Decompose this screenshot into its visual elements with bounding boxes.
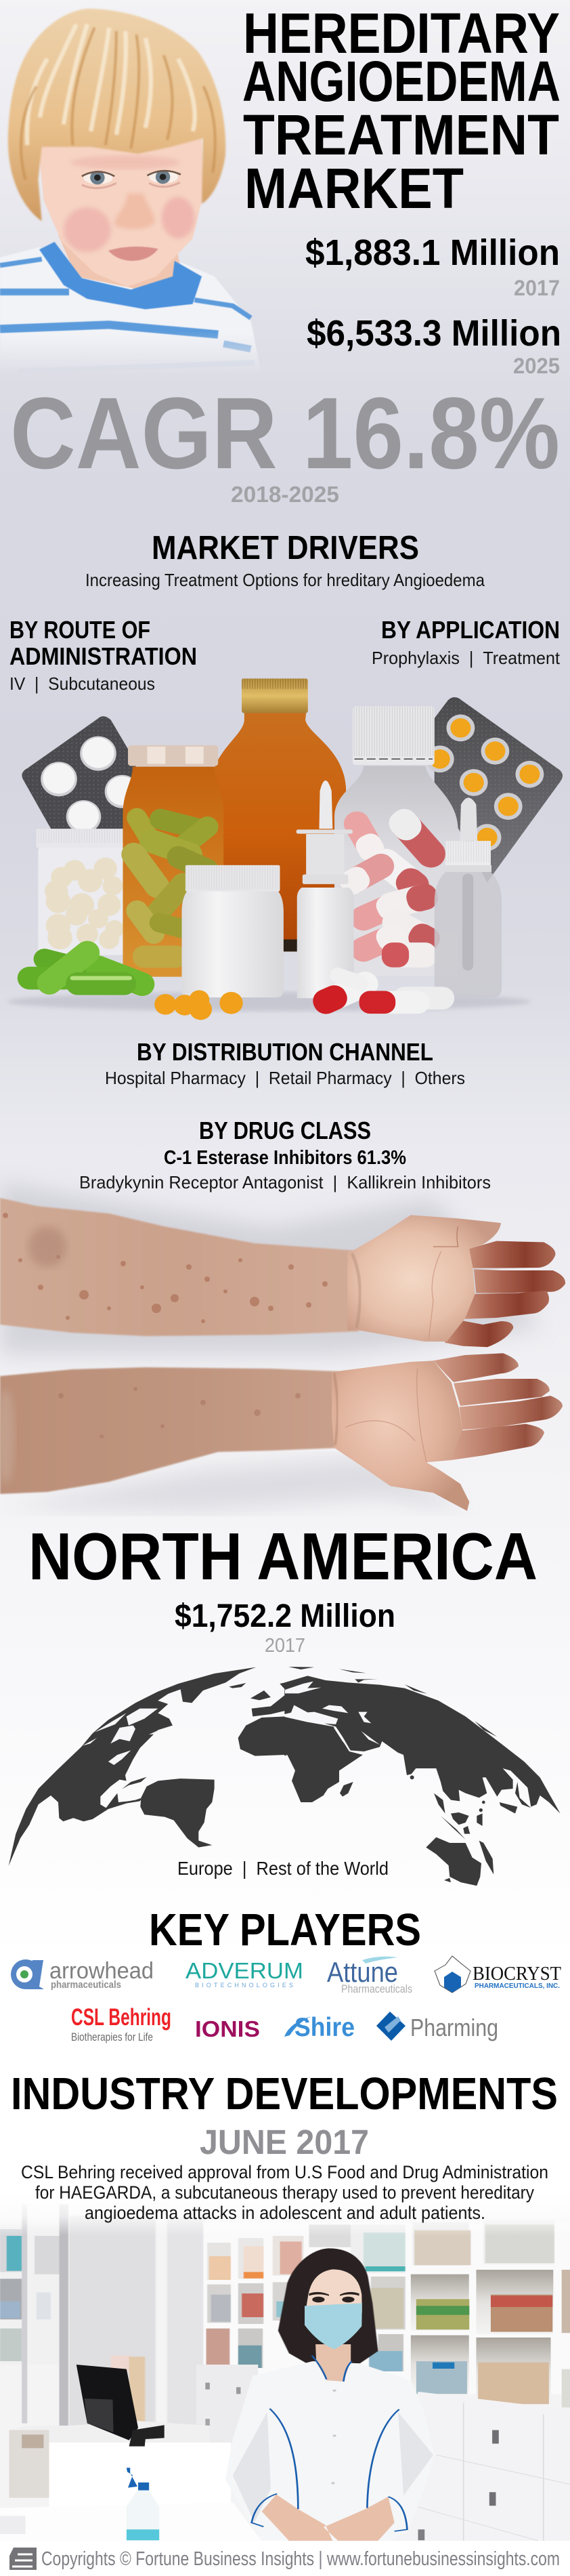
mouth (108, 247, 158, 261)
logo: Pharming (376, 2012, 498, 2041)
caribbean islands (122, 1777, 147, 1789)
north america heading (28, 1519, 538, 1657)
by route of administration: ADMINISTRATION (9, 642, 197, 670)
northwest africa (238, 1716, 285, 1756)
left shelves (0, 2204, 68, 2441)
western europe (252, 1695, 285, 1716)
upper forearm rash spots (3, 1213, 328, 1323)
shelves: right niches (411, 2270, 570, 2407)
by distribution channel: BY DISTRIBUTION CHANNEL (137, 1038, 433, 1066)
world map (9, 1667, 561, 1886)
lower fingers (433, 1353, 563, 1460)
lower palm and thumb (332, 1360, 469, 1511)
by drug class: BY DRUG CLASS (199, 1117, 371, 1144)
logo: Shire: Shire (294, 2013, 355, 2042)
logo: Attune: Attune (327, 1956, 398, 1988)
stat: 2017 market value: 2017 (514, 276, 560, 300)
red and white capsules (309, 965, 454, 1018)
large amber bottle (210, 678, 347, 951)
map west half (9, 1667, 285, 1866)
africa east (284, 1716, 363, 1802)
by drug class (79, 1117, 491, 1192)
key players heading: KEY PLAYERS (149, 1905, 421, 1955)
shelves: left column products (204, 2220, 570, 2394)
north america (9, 1667, 256, 1866)
shirt stripes (0, 259, 255, 371)
south america (140, 1779, 215, 1848)
left blister pack (22, 716, 139, 833)
orange softgels (154, 990, 243, 1020)
upper forearm (0, 1198, 359, 1336)
north america heading: 2017 (265, 1635, 305, 1657)
australia (426, 1837, 481, 1886)
by distribution channel (105, 1038, 465, 1088)
nasal spray bottle (297, 781, 354, 998)
by distribution channel: Hospital Pharmacy | Retail Pharmacy | Others (105, 1068, 465, 1088)
shirt (0, 247, 257, 360)
north america heading: $1,752.2 Million (175, 1598, 395, 1634)
logo: Pharming: Pharming (410, 2014, 498, 2041)
pharmacist coat (225, 2361, 435, 2541)
development description: angioedema attacks in adolescent and adult patients. (85, 2203, 485, 2223)
lower forearm marks (58, 1387, 301, 1438)
stat: 2017 market value (305, 232, 560, 300)
inland seas (284, 1682, 380, 1749)
forearms and hands (262, 2495, 395, 2541)
photo: child with facial rash (0, 9, 260, 380)
hair shadows (21, 28, 215, 180)
other regions: Europe | Rest of the World (177, 1858, 389, 1879)
logo: Adverum: BIOTECHNOLOGIES (195, 1982, 293, 1989)
arm shadows (0, 1182, 542, 1355)
canadian waters (83, 1709, 158, 1765)
madagascar (340, 1782, 353, 1797)
hands (332, 1215, 565, 1511)
by drug class: Bradykynin Receptor Antagonist | Kallikrein Inhibitors (79, 1172, 491, 1192)
upper palm (347, 1215, 501, 1342)
map east half (284, 1667, 561, 1886)
hair highlights (27, 24, 195, 145)
stat: 2025 market value: $6,533.3 Million (307, 313, 561, 354)
logo: BioCryst (435, 1956, 561, 1993)
title (242, 1, 561, 220)
iceland (229, 1683, 246, 1688)
upper fingers (445, 1241, 565, 1347)
logo: CSL Behring (71, 2004, 171, 2043)
neck (58, 235, 181, 289)
logo: Attune: Pharmaceuticals (341, 1982, 412, 1995)
logo: BioCryst: BIOCRYST (473, 1963, 561, 1985)
pharmacist hair (278, 2248, 378, 2366)
face (38, 138, 204, 287)
by route of administration: IV | Subcutaneous (9, 673, 155, 694)
right blister pack (426, 697, 563, 882)
market drivers: MARKET DRIVERS (152, 530, 419, 566)
collar (39, 242, 202, 309)
by drug class: C-1 Esterase Inhibitors 61.3% (164, 1147, 406, 1169)
development description (21, 2162, 548, 2223)
japan and korea (500, 1802, 517, 1814)
market drivers: Increasing Treatment Options for hreditary Angioedema (85, 570, 485, 590)
pharmacy room (0, 2195, 570, 2541)
logo: Adverum: ADVERUM (185, 1958, 303, 1983)
stat: CAGR: 2018-2025 (231, 482, 339, 507)
pharmacist (225, 2248, 435, 2541)
by application: Prophylaxis | Treatment (372, 648, 561, 668)
logo: arrowhead (11, 1958, 154, 1991)
tan box (111, 2356, 145, 2422)
sri lanka (410, 1775, 414, 1779)
pharmacist face (305, 2269, 362, 2312)
face mask (305, 2303, 362, 2349)
development date: JUNE 2017 (200, 2123, 369, 2161)
back wall (69, 2216, 156, 2432)
southeast asia islands (434, 1793, 445, 1814)
stat: 2017 market value: $1,883.1 Million (305, 232, 560, 273)
lower cabinets (196, 2365, 570, 2541)
market drivers (85, 530, 485, 590)
amber jar with green capsules (116, 745, 223, 977)
title: MARKET (244, 157, 464, 220)
illustration: medicine bottles and pills (7, 678, 563, 1020)
photo: arms with skin rash (0, 1182, 565, 1511)
logo: BioCryst: PHARMACEUTICALS, INC. (475, 1982, 560, 1990)
translucent bottle with capsules (334, 706, 458, 976)
buttons (331, 2390, 336, 2485)
eyes (82, 170, 181, 188)
logo: CSL Behring: CSL Behring (71, 2004, 171, 2031)
by application (372, 616, 561, 668)
by route of administration (9, 616, 197, 694)
hair (8, 9, 225, 221)
footer (0, 2541, 570, 2576)
clear jar with pearls (37, 829, 125, 955)
stat: 2025 market value (307, 313, 561, 378)
eurasia (284, 1676, 561, 1814)
dropper bottle (435, 797, 502, 997)
logo: CSL Behring: Biotherapies for Life (71, 2031, 153, 2043)
footer logo (9, 2548, 37, 2570)
spray bottle (127, 2468, 159, 2541)
coat piping (252, 2356, 407, 2531)
computer monitor (76, 2365, 165, 2447)
top fade (0, 2193, 570, 2236)
cheeks (64, 207, 111, 252)
british isles (250, 1690, 271, 1700)
logo: Ionis: IONIS (195, 2016, 260, 2041)
coat shading (233, 2412, 271, 2522)
eyes (309, 2292, 359, 2302)
stat: 2025 market value: 2025 (513, 354, 560, 378)
nose (114, 194, 155, 229)
logo: arrowhead: arrowhead (49, 1958, 154, 1984)
green capsules (18, 936, 158, 999)
lower forearm (0, 1367, 338, 1494)
pharmacist neck (315, 2344, 351, 2382)
by route of administration: BY ROUTE OF (9, 616, 150, 644)
photo: pharmacist in pharmacy (0, 2193, 570, 2541)
counter (0, 2421, 262, 2541)
logo: arrowhead: pharmaceuticals (51, 1979, 121, 1991)
white jar (181, 865, 284, 997)
arctic islands (288, 1667, 314, 1669)
